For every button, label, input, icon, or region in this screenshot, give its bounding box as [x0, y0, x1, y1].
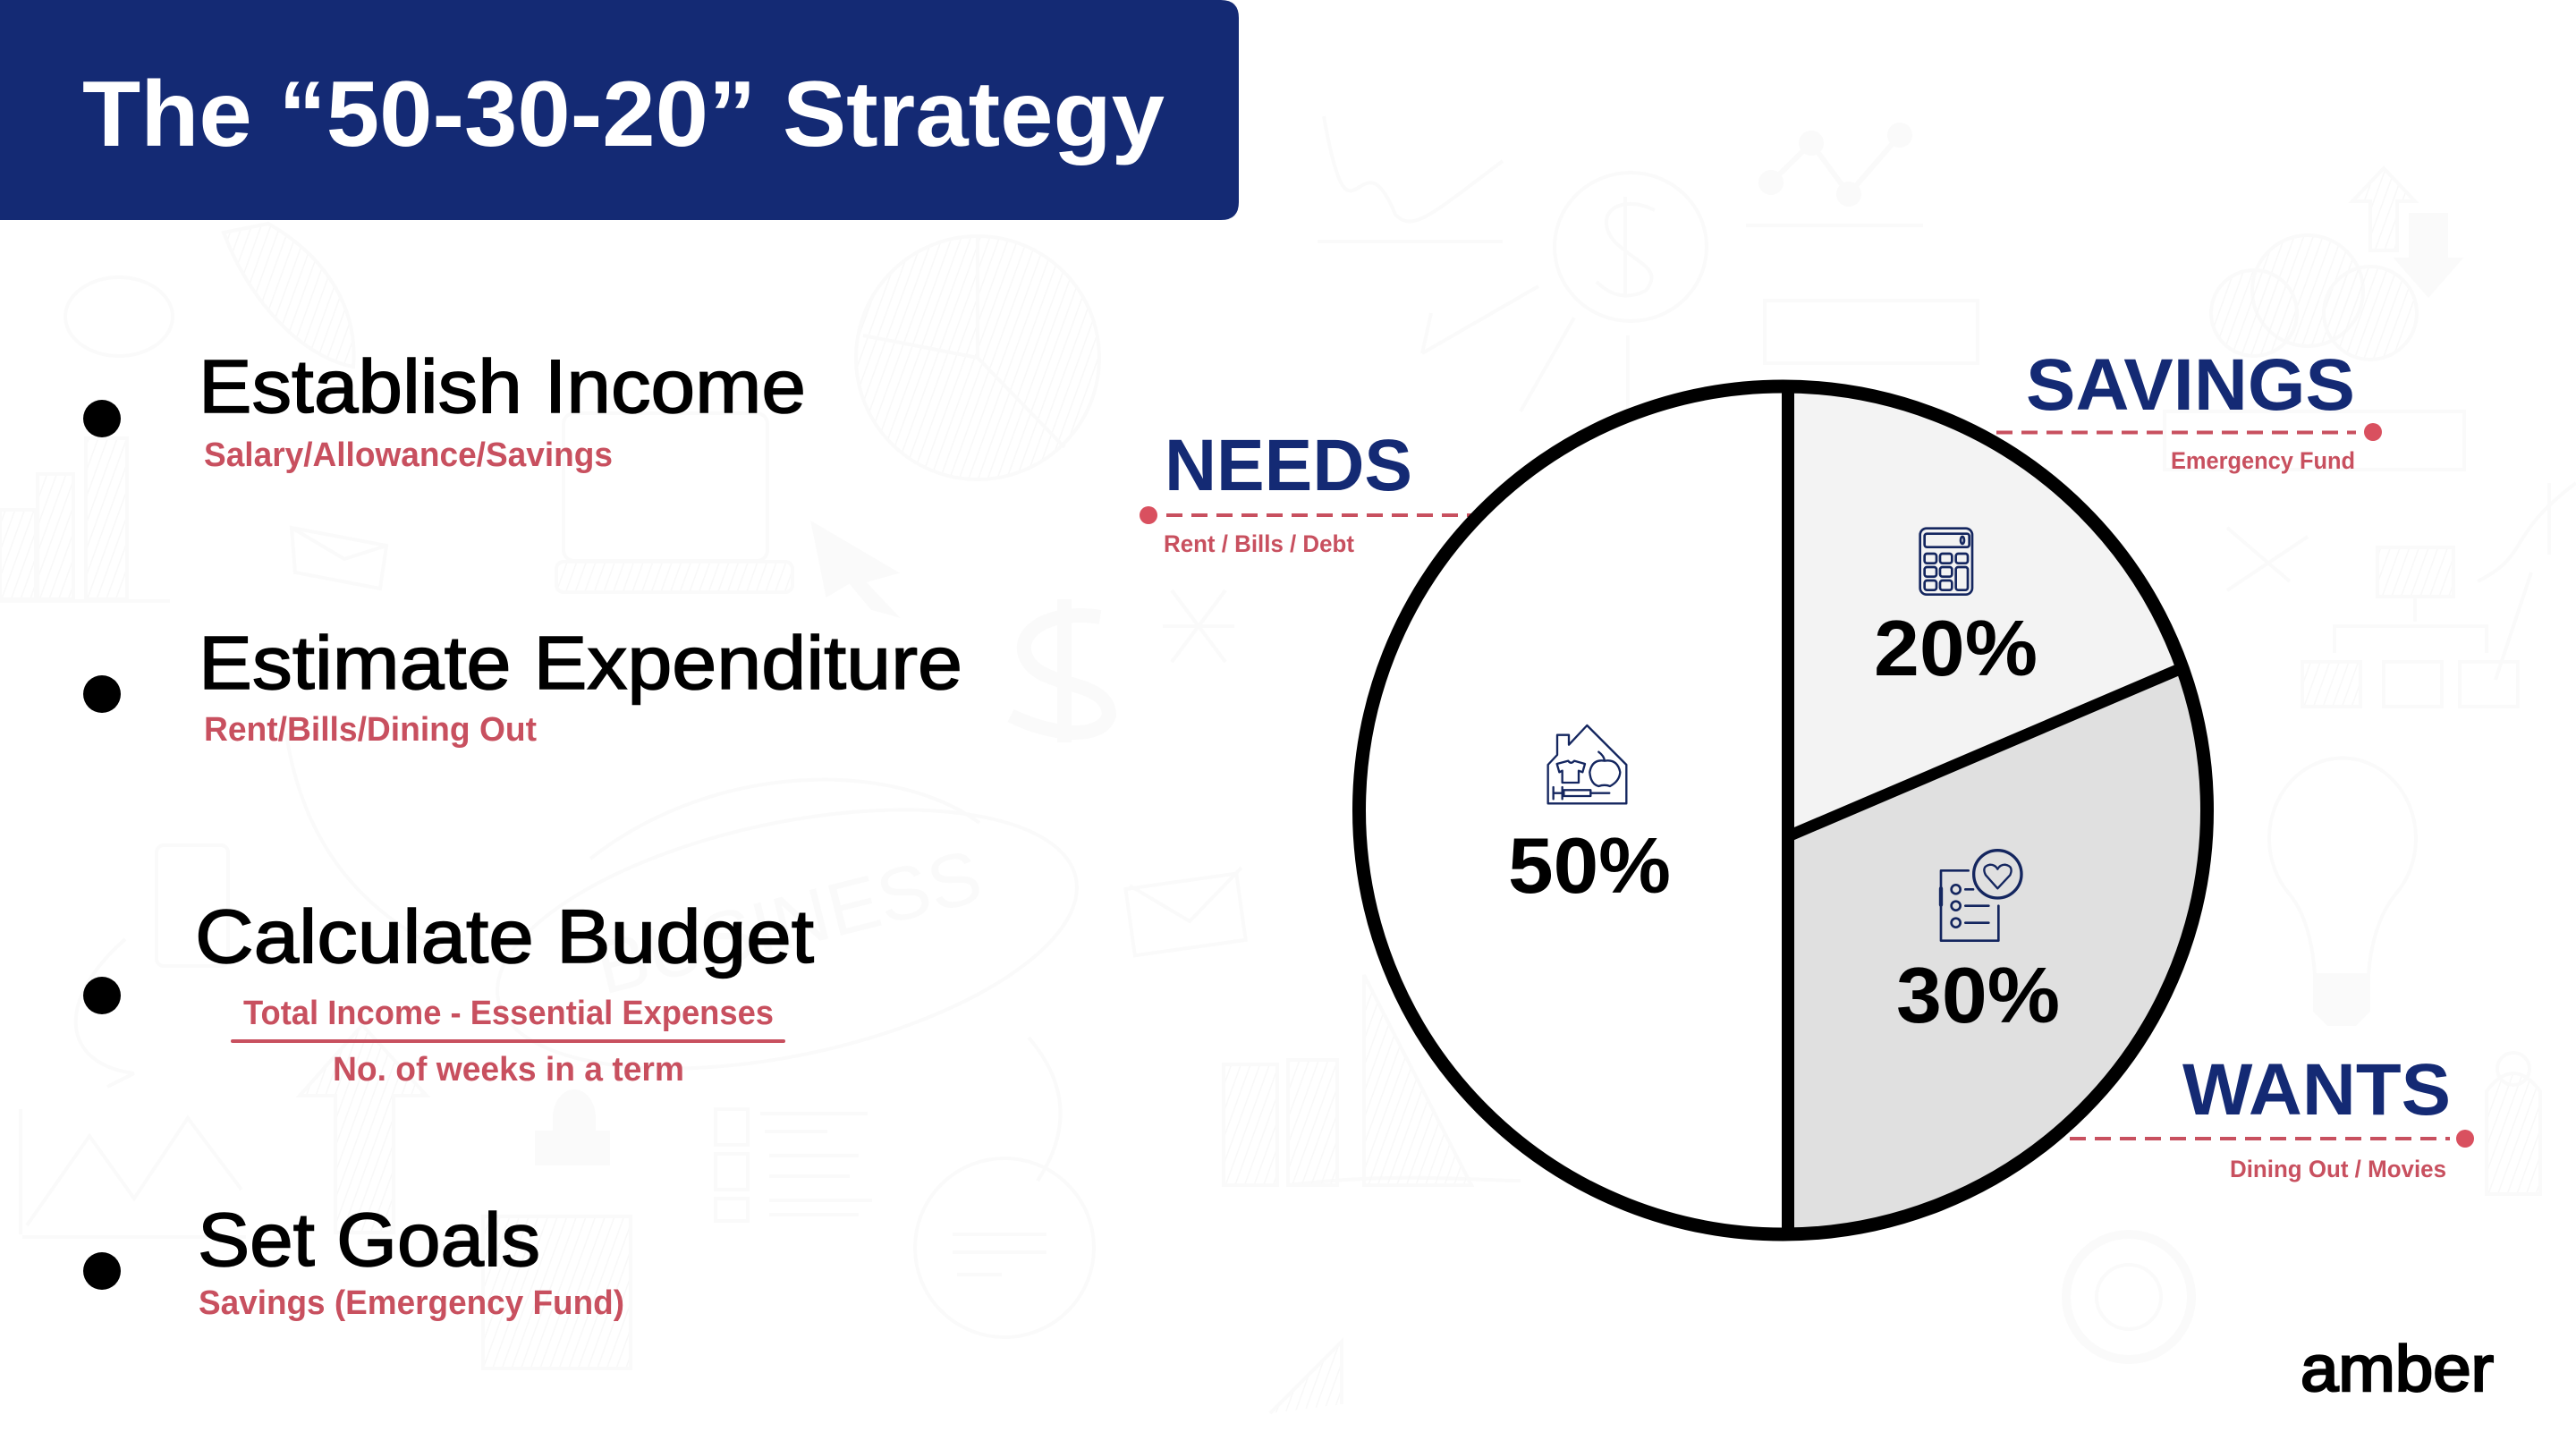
step: calculate budget: Calculate Budget — [195, 894, 814, 979]
slice: wants 30% — [1788, 668, 2206, 1234]
callout: savings: SAVINGS — [2026, 344, 2355, 426]
callout: wants: Dining Out / Movies — [2230, 1156, 2446, 1182]
step: establish income — [83, 344, 806, 474]
step: set goals: Savings (Emergency Fund) — [199, 1284, 624, 1322]
step: calculate budget: No. of weeks in a term — [333, 1051, 684, 1089]
step: set goals: Set Goals — [198, 1198, 540, 1282]
callout: savings — [1996, 344, 2382, 474]
callout: needs — [1140, 425, 1476, 557]
icon: calculator — [1920, 529, 1972, 595]
callout: wants: WANTS — [2182, 1049, 2451, 1131]
icon: checklist with heart — [1941, 851, 2021, 941]
label: 50%: 50% — [1508, 821, 1671, 910]
step: calculate budget: Total Income - Essential Expenses — [243, 995, 774, 1032]
title banner — [0, 0, 1239, 220]
slice: savings 20% — [1788, 386, 2182, 836]
pie chart — [1360, 385, 2207, 1236]
step: estimate expenditure — [83, 621, 962, 749]
step: establish income: Salary/Allowance/Savings — [204, 436, 613, 474]
title: The “50-30-20” Strategy — [82, 63, 1165, 166]
label: 30%: 30% — [1896, 951, 2060, 1039]
callout: needs: Rent / Bills / Debt — [1164, 530, 1354, 557]
background doodles: BUSINESS — [588, 834, 989, 1010]
callout: needs: NEEDS — [1165, 425, 1412, 506]
step: set goals — [83, 1198, 624, 1322]
callout: wants — [2070, 1049, 2474, 1182]
step: estimate expenditure: Rent/Bills/Dining Out — [204, 711, 537, 749]
label: 20%: 20% — [1874, 604, 2038, 692]
logo: amber: amber — [2301, 1334, 2494, 1405]
step: establish income: Establish Income — [199, 344, 806, 428]
icon: house with essentials — [1548, 725, 1626, 803]
step: estimate expenditure: Estimate Expenditure — [199, 621, 962, 705]
step: calculate budget — [83, 894, 814, 1089]
callout: savings: Emergency Fund — [2171, 447, 2355, 474]
